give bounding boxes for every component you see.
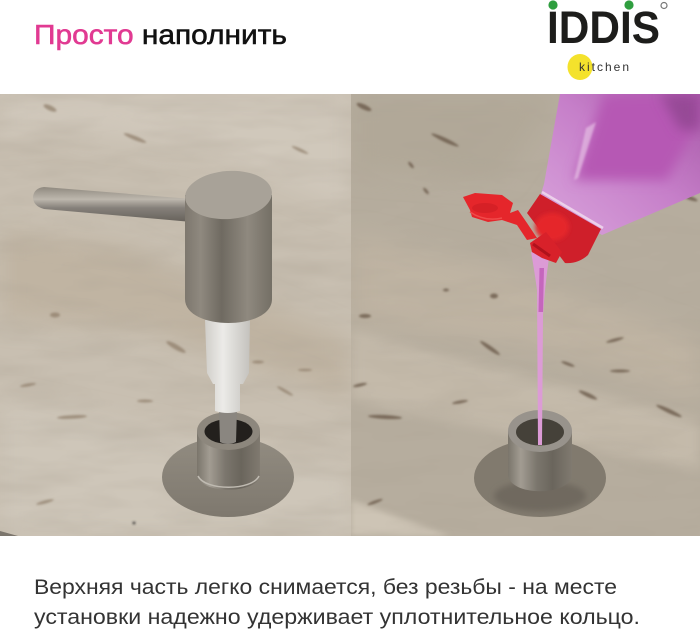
cap ring [527, 194, 601, 263]
description text [34, 575, 640, 629]
panel: pouring soap into the base [351, 94, 700, 536]
flange [474, 410, 606, 517]
dispenser body [183, 168, 274, 323]
base collar [508, 431, 572, 491]
base collar [197, 431, 260, 490]
nozzle [530, 232, 562, 263]
logo yellow blob [568, 54, 592, 80]
logo: IDDIS kitchen [547, 0, 667, 80]
soap bottle [540, 94, 700, 235]
soap inside bottle [574, 94, 700, 180]
white tube [205, 320, 250, 413]
title: Просто наполнить [34, 19, 287, 50]
bottom edge of image [0, 531, 18, 536]
stone surface [0, 94, 351, 536]
lid and hinge [463, 193, 537, 240]
description line 1: Верхняя часть легко снимается, без резьбы - на месте [34, 575, 617, 599]
stone flecks [353, 101, 698, 506]
red flip cap [463, 192, 603, 263]
flange [162, 412, 294, 517]
lever handle [33, 187, 192, 222]
inner rod [219, 412, 237, 444]
logo wordmark: IDDIS [547, 2, 660, 53]
stone surface [351, 94, 700, 536]
description line 2: установки надежно удерживает уплотнительное кольцо. [34, 605, 640, 629]
panel: dispenser removed from its base [0, 94, 351, 536]
logo sub-brand: kitchen [579, 60, 629, 74]
soap stream [531, 252, 549, 445]
stone flecks [20, 103, 312, 524]
